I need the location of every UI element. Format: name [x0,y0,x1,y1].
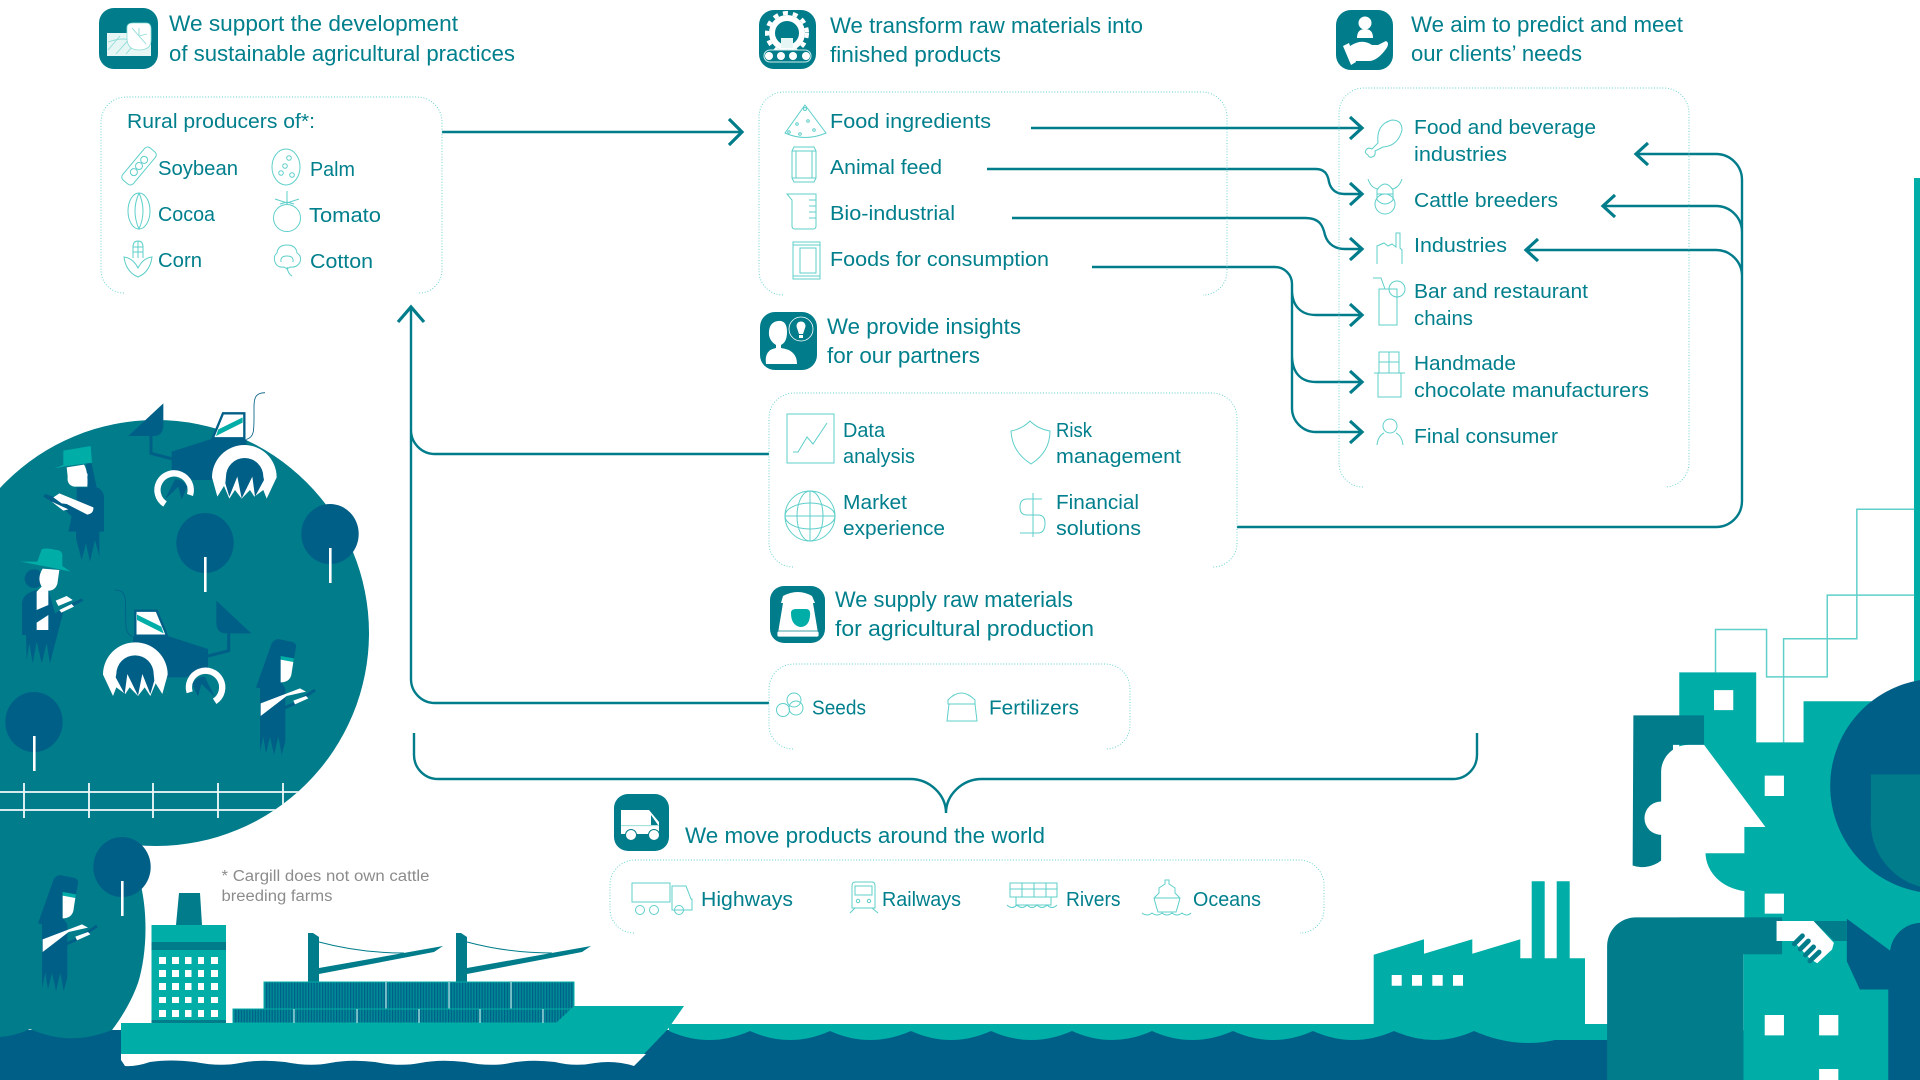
label: bar and restaurant [1414,281,1588,330]
person left head [1644,745,1765,917]
icon: factory [1377,233,1402,264]
label: palm: Palm [310,159,355,181]
heading: of sustainable agricultural practices [169,41,515,66]
heading: We supply raw materials [835,587,1073,612]
label: seeds: Seeds [812,698,866,720]
icon: barge [1007,883,1057,908]
label: data analysis: Data [843,420,886,442]
label: corn: Corn [158,250,202,272]
city outlines [1716,509,1914,742]
label: foods for consumption: Foods for consumption [830,249,1049,271]
ship hull [121,1006,684,1054]
icon: dollar [1020,493,1045,537]
icon: drink [1373,278,1405,325]
ship mast and boom [308,933,591,983]
footnote: * Cargill does not own cattle [222,868,430,885]
city buildings [1679,672,1920,1080]
person right head [1830,679,1920,893]
label: bar and restaurant: Bar and restaurant [1414,281,1588,303]
farmer three [256,639,315,755]
dotted panel frame [759,92,1227,295]
icon: person [1377,419,1403,445]
icon: globe [785,491,835,541]
label: soybean: Soybean [158,158,238,180]
quay band with scallops [669,1024,1620,1043]
icon: fertilizer bag [947,693,977,721]
label: cotton: Cotton [310,251,373,273]
icon: beaker [787,194,816,229]
farmer one [43,446,104,562]
heading: We move products around the world [685,823,1045,848]
dotted panel frame [101,97,442,293]
person left hair [1633,715,1704,867]
farmer four [38,875,97,991]
badge: gear and conveyor [759,10,816,69]
label: rivers: Rivers [1066,889,1120,911]
subheading: Rural producers of*: [127,111,315,133]
tree [301,504,359,583]
icon: packaged food [793,242,820,279]
connector: producers to transform [442,119,742,145]
heading: We transform raw materials into [830,13,1143,38]
icon: shield [1011,421,1050,464]
panel: finished products [759,10,1227,295]
label: food and beverage: Food and beverage [1414,117,1596,139]
label: oceans: Oceans [1193,889,1261,911]
panel: insights [760,312,1237,567]
icon: cotton [274,245,301,276]
label: handmade chocolate: Handmade [1414,353,1516,375]
tree [176,513,234,592]
label: cocoa: Cocoa [158,204,216,226]
fence [0,783,298,818]
label: financial solutions: Financial [1056,492,1139,514]
badge: van [614,794,669,851]
ship [121,893,684,1066]
tree [93,837,151,916]
badge: hand with person [1336,10,1393,70]
badge: seed bag [770,586,825,643]
city and handshake scene [1607,509,1920,1080]
tractor lower [103,590,251,701]
icon: ocean ship [1142,880,1191,915]
icon: cocoa [128,193,150,229]
tractor upper [128,393,277,504]
label: bio-industrial: Bio-industrial [830,203,955,225]
panel: client needs [1336,10,1689,487]
farm figures [21,393,315,991]
label: food and beverage [1414,117,1596,166]
label: market experience [843,492,945,540]
panel: logistics [610,794,1324,933]
label: highways: Highways [701,889,793,911]
ship tower [152,893,226,1023]
dotted panel frame [610,860,1324,933]
heading: We support the development [169,11,459,36]
illustration: farm scene [0,393,370,1038]
footnote [222,868,430,905]
ship containers lower [233,1009,572,1023]
connector: insights feedback to clients [1237,143,1742,527]
connector: bio-industrial [1012,218,1362,260]
heading: We aim to predict and meet [1411,12,1684,37]
icon: soybean [120,145,158,187]
ship white waterline [121,1054,646,1066]
person left body [1607,917,1782,1080]
icon: cow [1368,179,1402,214]
heading [169,11,515,66]
label: railways: Railways [882,889,961,911]
dotted panel frame [769,664,1130,749]
connector: food ingredients [1031,117,1362,139]
label: financial solutions: solutions [1056,518,1141,540]
heading [1411,12,1684,66]
label: food ingredients: Food ingredients [830,111,991,133]
water [0,1030,1920,1080]
tree [5,692,63,771]
icon: food ingredients [785,105,826,138]
farm field circle [0,420,369,846]
label: handmade chocolate: chocolate manufacturers [1414,380,1649,402]
panel: raw materials [769,586,1130,749]
farm blob foreground [0,1028,113,1038]
icon: corn [124,241,152,277]
icon: seeds [776,693,803,716]
icon: drumstick [1365,120,1402,157]
heading: for agricultural production [835,616,1094,641]
icon: chocolate [1374,352,1405,397]
heading [835,587,1094,641]
label: tomato: Tomato [309,205,381,227]
heading [830,13,1143,67]
label: risk management [1056,420,1181,468]
farm lower blob [0,690,145,1038]
label: market experience: experience [843,518,945,540]
label: financial solutions [1056,492,1141,540]
connector: insights and raw materials back to producers [398,307,769,703]
person right body [1847,919,1920,1080]
badge: field and leaf [99,8,158,69]
label: bar and restaurant: chains [1414,308,1473,330]
footnote: breeding farms [222,888,333,905]
icon: train [850,882,878,913]
label: handmade chocolate [1414,353,1649,402]
badge: advisor with idea [760,312,817,370]
label: industries: Industries [1414,235,1507,257]
ship containers upper [264,982,574,1009]
connector: logistics brace [414,733,1477,813]
dotted panel frame [1339,88,1689,487]
factory [1374,881,1585,1026]
farmer two [21,548,83,663]
label: food and beverage: industries [1414,144,1507,166]
background strip: right edge [1914,178,1920,688]
heading [827,314,1021,368]
dotted panel frame [769,393,1237,567]
heading: for our partners [827,343,980,368]
label: final consumer: Final consumer [1414,426,1558,448]
connector: animal feed [987,169,1362,205]
label: fertilizers: Fertilizers [989,698,1079,720]
label: data analysis [843,420,915,468]
heading: our clients’ needs [1411,41,1582,66]
handshake [1777,921,1847,963]
connector: foods for consumption [1092,267,1362,443]
heading: finished products [830,42,1001,67]
label: cattle breeders: Cattle breeders [1414,190,1558,212]
icon: tomato [274,191,300,232]
icon: truck [632,883,692,914]
label: risk management: management [1056,446,1181,468]
heading: We provide insights [827,314,1021,339]
label: risk management: Risk [1056,420,1093,442]
label: animal feed: Animal feed [830,157,942,179]
label: market experience: Market [843,492,907,514]
icon: animal feed [792,147,816,182]
icon: data chart [787,414,834,463]
label: data analysis: analysis [843,446,915,468]
building windows [1714,690,1838,1080]
icon: palm [272,149,300,185]
panel: sustainable agriculture [99,8,515,293]
